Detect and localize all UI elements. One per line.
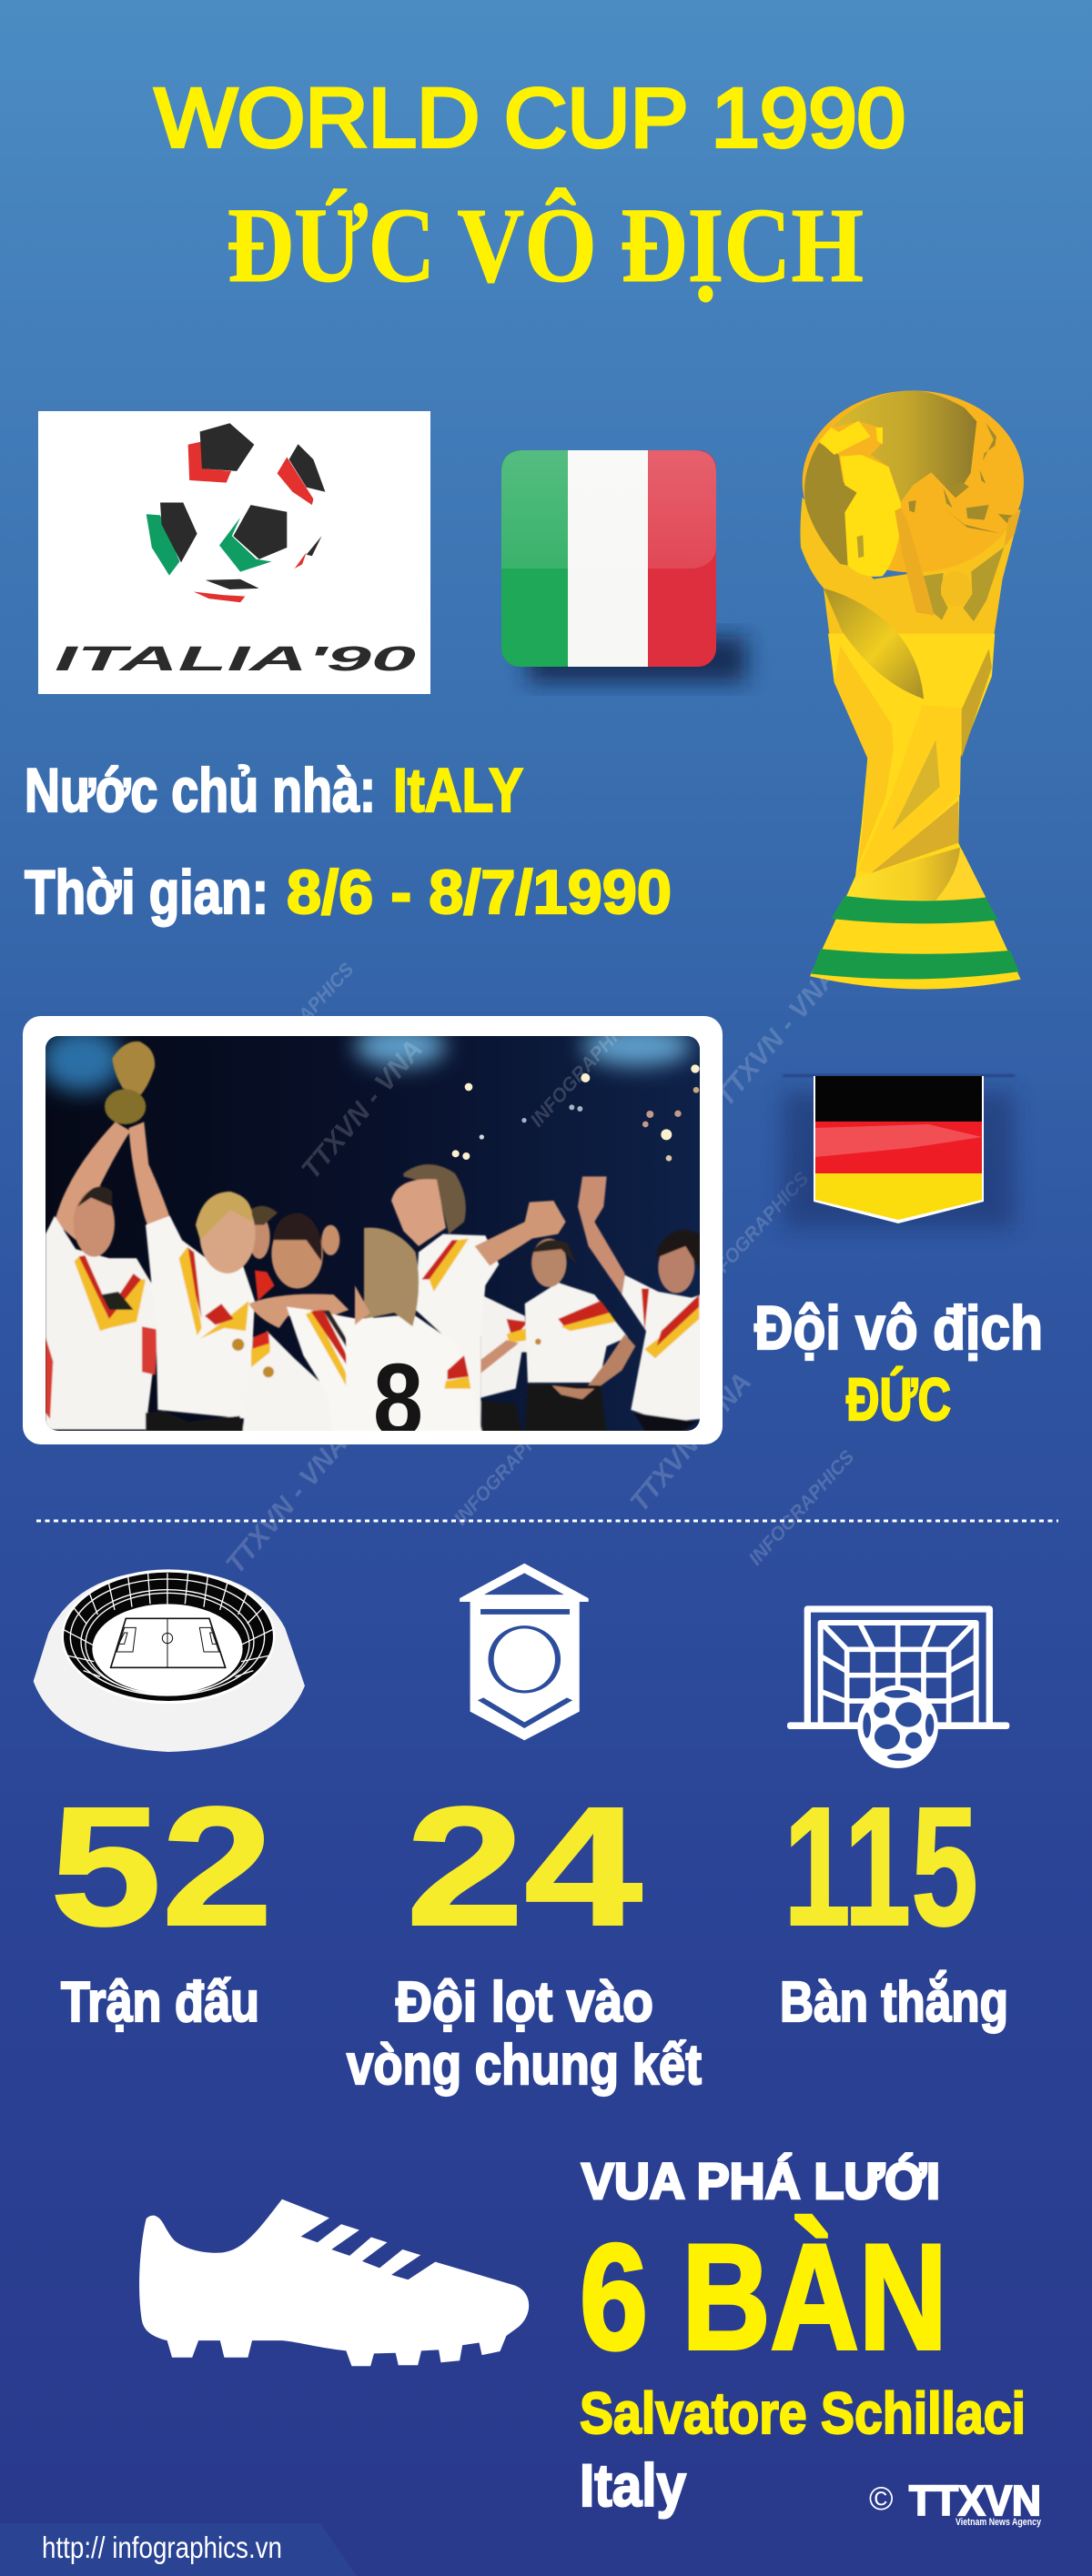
right players (346, 1164, 701, 1433)
champion team label (754, 1293, 1043, 1433)
agency logo (869, 2477, 1042, 2528)
raised arm 1 (55, 1122, 130, 1240)
watermarks: TTXVN - VNA (710, 961, 843, 1112)
watermarks (220, 959, 858, 1579)
player country: Italy (580, 2451, 686, 2519)
figure negative spaces (923, 573, 948, 620)
title line 1: WORLD CUP 1990 (155, 72, 905, 165)
left arm facet (834, 646, 894, 864)
stat: goals: Bàn thắng (780, 1971, 1008, 2034)
icon: logo football (147, 423, 325, 602)
info: host country: ItALY (393, 756, 523, 825)
icon: football boot (139, 2199, 529, 2366)
stat: teams: 24 (406, 1773, 642, 1961)
watermarks: TTXVN - VNA (220, 1429, 353, 1579)
agency logo: © (869, 2480, 894, 2517)
icon: German flag ribbon (783, 1074, 1015, 1228)
info: dates (25, 858, 672, 927)
trophy globe and figure (800, 390, 1024, 649)
watermarks: INFOGRAPHICS (450, 1406, 563, 1529)
centre band (858, 705, 962, 873)
goals count: 6 BÀN (580, 2213, 947, 2380)
right dark facet (962, 649, 992, 758)
far right player (578, 1176, 625, 1294)
footer band (0, 2523, 357, 2576)
player number 8 shoulder (287, 1307, 373, 1433)
champion team label: ĐỨC (846, 1365, 951, 1433)
floodlight spots (452, 1064, 700, 1162)
icon: stadium (34, 1569, 305, 1752)
heading: VUA PHÁ LƯỚI (581, 2152, 940, 2209)
stat: teams: vòng chung kết (347, 2034, 702, 2097)
globe dark ocean (821, 390, 976, 502)
number 8 player back (346, 1316, 482, 1433)
top scorer block (580, 2152, 1026, 2519)
trophy lower body (810, 589, 1021, 990)
watermarks: INFOGRAPHICS (700, 1168, 813, 1291)
watermarks: INFOGRAPHICS (745, 1446, 858, 1569)
centre wedge (871, 800, 958, 873)
panel: Italia 90 logo (38, 411, 430, 694)
stand grid (64, 1573, 272, 1696)
tall player (416, 1234, 499, 1433)
player 2 jersey (146, 1216, 255, 1419)
agency logo: TTXVN (909, 2477, 1041, 2524)
logo wordmark: ITALIA'90 (55, 640, 416, 679)
middle player (525, 1283, 628, 1383)
stat: teams: Đội lọt vào (396, 1971, 653, 2034)
left players (46, 1041, 373, 1433)
centre dark triangle (892, 740, 940, 830)
info: host country: Nước chủ nhà: (25, 756, 376, 825)
agency logo: Vietnam News Agency (956, 2517, 1042, 2528)
player name: Salvatore Schillaci (580, 2380, 1026, 2446)
player 1 jersey (46, 1216, 157, 1430)
title (155, 72, 905, 305)
watermarks: TTXVN - VNA (624, 1367, 757, 1517)
panel: champions photo (23, 1008, 723, 1458)
champion team label: Đội vô địch (754, 1293, 1043, 1363)
icon: pennant badge (460, 1564, 589, 1740)
icon: Italian flag button (501, 450, 746, 682)
lower outline (810, 634, 1021, 990)
hugging arm (248, 1294, 349, 1328)
info: dates: 8/6 - 8/7/1990 (287, 858, 672, 927)
stat: matches: Trận đấu (61, 1971, 259, 2034)
photo watermarks: TTXVN - VNA (296, 1034, 429, 1184)
watermarks: INFOGRAPHICS (245, 959, 358, 1082)
player 3 (243, 1331, 332, 1433)
held trophy (112, 1041, 155, 1094)
info: dates: Thời gian: (25, 858, 268, 927)
stat: goals: 115 (784, 1773, 978, 1961)
lower shade (824, 589, 924, 699)
green band 2 (812, 949, 1019, 979)
stadium pitch (111, 1618, 226, 1667)
Africa and Eurasia land (840, 455, 901, 577)
figure arm (895, 508, 935, 616)
stat: matches: 52 (50, 1773, 273, 1961)
footer url: http:// infographics.vn (42, 2531, 282, 2564)
raised arm 2 (127, 1121, 170, 1225)
upper body and arms (800, 498, 1021, 649)
globe (803, 390, 1024, 572)
jersey number: 8 (373, 1343, 423, 1458)
Asia islands (908, 423, 1013, 534)
stat: matches (50, 1773, 273, 2034)
icon: goal with ball (787, 1609, 1009, 1768)
team celebration photo (46, 1036, 700, 1431)
title line 2: ĐỨC VÔ ĐỊCH (227, 186, 864, 305)
behind player (480, 1294, 528, 1398)
base facet (846, 848, 960, 901)
stat: goals (780, 1773, 1008, 2034)
figure head (941, 571, 971, 607)
photo watermarks: INFOGRAPHICS (527, 1008, 640, 1131)
green band 1 (831, 896, 998, 923)
stat: teams (347, 1773, 702, 2097)
globe atlantic (804, 443, 857, 566)
stadium lights glow (41, 1026, 692, 1092)
icon: World Cup trophy (800, 390, 1024, 990)
photo watermarks (301, 1036, 617, 1177)
